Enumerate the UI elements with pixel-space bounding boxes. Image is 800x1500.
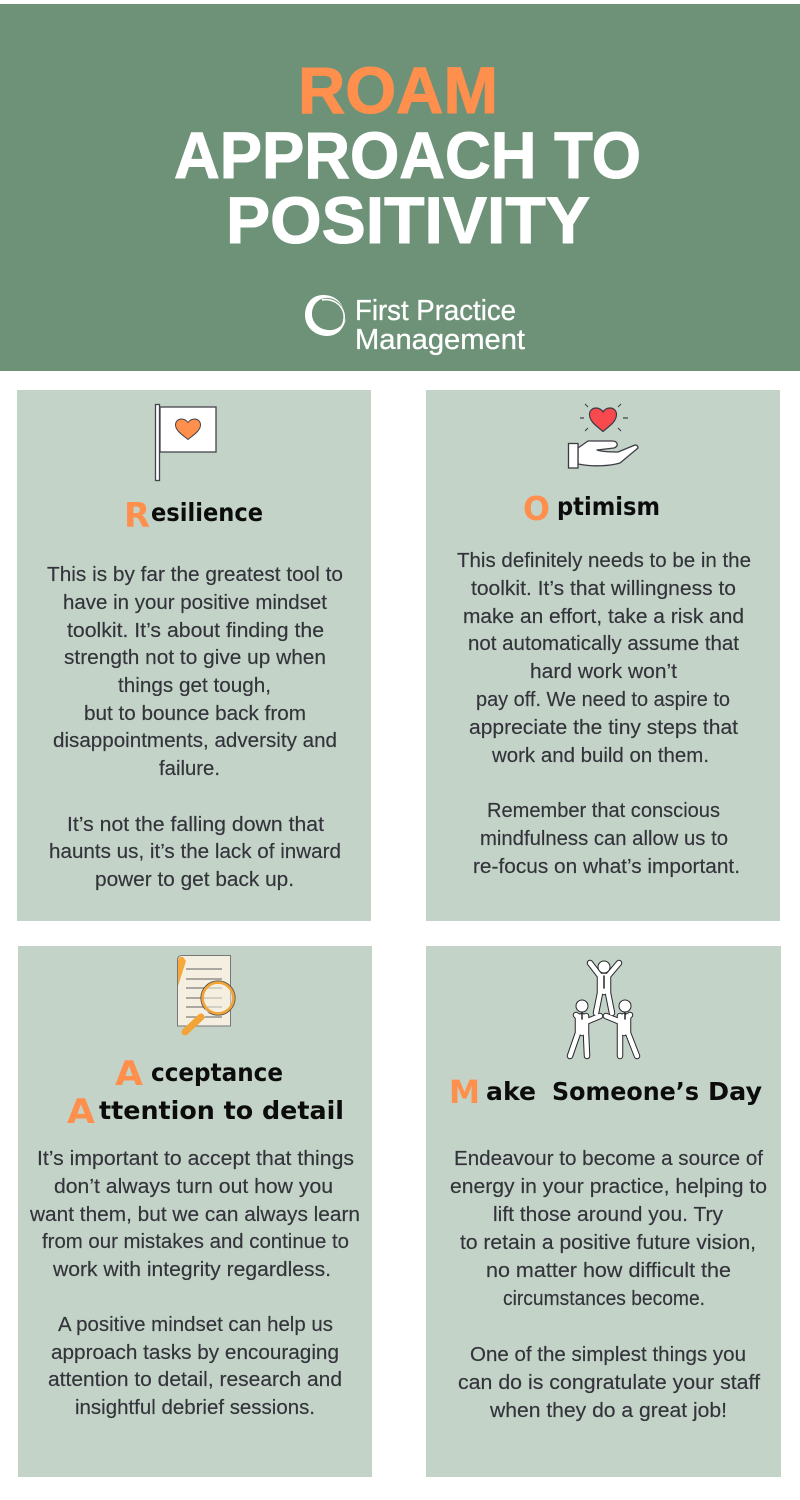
text: make someone's day body: Endeavour to become a source of — [454, 1147, 763, 1170]
heading: Make Someone's Day — [449, 1073, 762, 1111]
text: resilience body: haunts us, it’s the lack of inward — [49, 840, 341, 863]
text: resilience body: It’s not the falling down that — [67, 813, 324, 836]
text: make someone's day body: can do is congratulate your staff — [458, 1371, 760, 1394]
panel: header — [0, 4, 800, 371]
icon: document with magnifying glass — [178, 956, 235, 1032]
text: optimism body: work and build on them. — [491, 744, 709, 767]
text: optimism body: hard work won’t — [530, 660, 677, 683]
heading: Acceptance: cceptance — [151, 1058, 283, 1087]
heading: Make Someone's Day: Day — [708, 1077, 762, 1106]
heading: Attention to detail: ttention to detail — [99, 1096, 344, 1125]
text: optimism body: re-focus on what’s important. — [473, 855, 740, 878]
icon: flag with heart — [156, 404, 216, 480]
heading: Attention to detail — [67, 1092, 344, 1132]
text: acceptance body: from our mistakes and continue to — [42, 1230, 349, 1253]
heading: Optimism: ptimism — [557, 492, 660, 521]
text: resilience body: things get tough, — [118, 674, 271, 697]
text: optimism body: This definitely needs to be in the — [457, 549, 751, 572]
text: acceptance body: approach tasks by encouraging — [51, 1341, 339, 1364]
heading: Make Someone's Day: ake — [486, 1077, 536, 1106]
icon: three people forming a pyramid — [570, 961, 637, 1056]
text: optimism body: make an effort, take a risk and — [463, 605, 744, 628]
icon: hand holding heart — [568, 404, 638, 468]
heading: Make Someone's Day: Someone’s — [552, 1077, 699, 1106]
text: acceptance body — [29, 1147, 360, 1419]
text: make someone's day body: lift those around you. Try — [493, 1203, 724, 1226]
heading: Resilience: esilience — [151, 498, 263, 527]
text: resilience body: This is by far the greatest tool to — [47, 563, 343, 586]
heading: Resilience: R — [124, 496, 150, 536]
panel: optimism — [426, 390, 780, 921]
text: resilience body: toolkit. It’s about finding the — [67, 619, 324, 642]
title: APPROACH TO — [174, 118, 641, 192]
text: resilience body: disappointments, adversity and — [53, 729, 337, 752]
logo: First Practice Management: Management — [355, 324, 525, 356]
text: optimism body: pay off. We need to aspire to — [476, 688, 730, 711]
heading: Attention to detail: A — [67, 1092, 96, 1132]
heading: Optimism — [523, 489, 660, 528]
title — [174, 53, 641, 257]
logo: First Practice Management: First Practice — [355, 295, 516, 327]
heading: Make Someone's Day: M — [449, 1073, 480, 1111]
text: optimism body: toolkit. It’s that willingness to — [471, 577, 736, 600]
panel: make someone's day — [426, 946, 781, 1477]
text: resilience body: power to get back up. — [95, 868, 294, 891]
heading: Acceptance: A — [115, 1054, 144, 1094]
heading: Optimism: O — [523, 489, 550, 528]
text: optimism body: mindfulness can allow us to — [480, 827, 728, 850]
text: resilience body: but to bounce back from — [84, 702, 306, 725]
heading: Resilience — [124, 496, 263, 536]
title: POSITIVITY — [226, 183, 590, 257]
panel: resilience — [17, 390, 371, 921]
text: resilience body: strength not to give up when — [64, 646, 326, 669]
text: optimism body: not automatically assume that — [468, 632, 739, 655]
text: make someone's day body: One of the simplest things you — [470, 1343, 746, 1366]
text: acceptance body: It’s important to accept that things — [37, 1147, 354, 1170]
text: acceptance body: don’t always turn out how you — [54, 1175, 333, 1198]
text: acceptance body: A positive mindset can help us — [58, 1313, 333, 1336]
text: optimism body: Remember that conscious — [487, 799, 720, 822]
logo: First Practice Management — [305, 295, 525, 356]
text: resilience body: have in your positive mindset — [63, 591, 327, 614]
text: optimism body — [457, 549, 751, 878]
text: acceptance body: want them, but we can always learn — [29, 1203, 360, 1226]
text: make someone's day body: energy in your practice, helping to — [450, 1175, 767, 1198]
text: make someone's day body: when they do a great job! — [489, 1399, 727, 1422]
text: make someone's day body — [450, 1147, 767, 1422]
heading: Acceptance — [115, 1054, 283, 1094]
text: make someone's day body: to retain a positive future vision, — [460, 1231, 756, 1254]
text: resilience body — [47, 563, 343, 891]
text: make someone's day body: circumstances become. — [503, 1287, 705, 1310]
text: optimism body: appreciate the tiny steps that — [469, 716, 738, 739]
text: make someone's day body: no matter how difficult the — [486, 1259, 731, 1282]
title: ROAM — [298, 53, 498, 127]
text: acceptance body: work with integrity regardless. — [52, 1258, 331, 1281]
text: acceptance body: insightful debrief sessions. — [75, 1396, 315, 1419]
panel: acceptance and attention to detail — [18, 946, 372, 1477]
text: resilience body: failure. — [159, 757, 220, 780]
text: acceptance body: attention to detail, research and — [48, 1368, 342, 1391]
